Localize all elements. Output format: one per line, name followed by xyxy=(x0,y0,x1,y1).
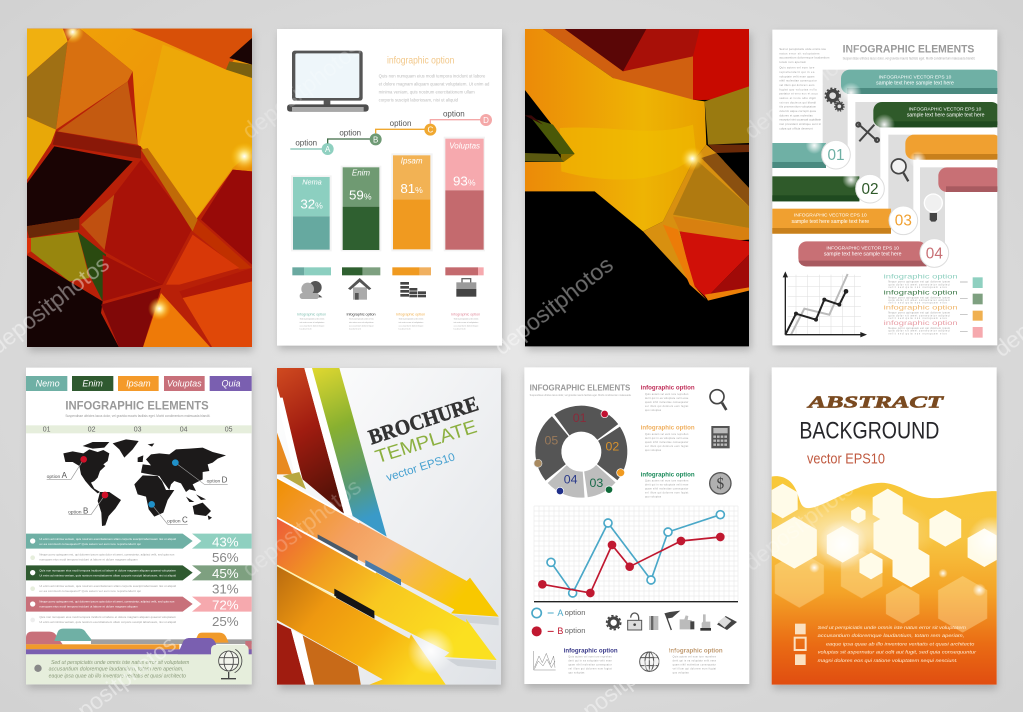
icon: pointing hand xyxy=(700,614,711,631)
row: 31%: ex ea commodi consequatur? Quis autem vel eum iure reprehenderit qui xyxy=(39,589,141,593)
number band: 05 xyxy=(225,427,233,434)
legend: A option: A xyxy=(557,608,563,618)
icon: gear xyxy=(607,616,621,630)
icon: thumb up xyxy=(680,615,694,629)
row: 25%: Quis non numquam eius modi tempora incidunt ut labore et dolore magnam aliquam quaerat voluptatem xyxy=(39,615,177,619)
colour swatches xyxy=(292,267,484,275)
text block: left column: accusantium doloremque laudantium xyxy=(779,56,830,60)
ribbon: teal lower with 01 xyxy=(771,140,850,169)
label column 2: Sed ut perspiciatis unde omnis xyxy=(349,318,374,321)
text block: left column: samus et iusto odio digni xyxy=(779,96,816,100)
tab: Voluptas xyxy=(164,376,205,391)
footer text panel: Sed ut perspiciatis unde omnis iste natus error sit voluptatem xyxy=(51,660,190,666)
text block: left column: natus error sit voluptatem xyxy=(779,51,820,55)
option block: tan: vel illum qui dolorem eum fugiat xyxy=(673,668,716,671)
step connector D: D xyxy=(483,116,489,125)
number band: 02 xyxy=(88,427,96,434)
row: 25%: Ut enim ad minima veniam, quis nostrum exercitationem ullam corporis suscipit laboriosam, nisi ut aliquid xyxy=(39,620,176,624)
option block: tan: quam nihil molestiae consequatur xyxy=(673,664,716,667)
ribbon: green lower with 02: 02 xyxy=(861,181,879,198)
lens flares xyxy=(61,21,258,320)
label column 4: Sed ut perspiciatis unde omnis xyxy=(454,318,478,321)
watermarks on light covers: depositphotos xyxy=(739,467,868,576)
label column 2: iste natus error sit voluptatem xyxy=(349,321,374,324)
ribbon: teal lower with 01: 01 xyxy=(827,147,845,164)
option block: tan xyxy=(669,649,723,674)
label column 3: accusantium doloremque xyxy=(399,324,424,327)
option block: magenta: quam nihil molestiae consequatur xyxy=(645,401,689,404)
panel: infographic elements steps xyxy=(771,28,1002,346)
label column 2: laudantium xyxy=(349,327,361,330)
bar: Nema 32%: 32% xyxy=(300,197,323,212)
row: 31% xyxy=(30,582,239,597)
watermarks on light covers xyxy=(237,35,868,582)
legend item: orange xyxy=(884,306,983,321)
title: BROCHURE: BROCHURE xyxy=(365,391,481,449)
row: 56%: 56% xyxy=(212,550,239,565)
text block: magni dolores eos qui ratione voluptatem sequi nesciunt. xyxy=(818,658,958,664)
map marker: option A: option A xyxy=(47,471,68,480)
polygon facets xyxy=(525,29,749,301)
text block: left column: nihil molestiae consequatur xyxy=(779,79,817,83)
legend item: pink xyxy=(884,321,983,338)
bright hexagons xyxy=(768,484,1001,587)
sub heading: Suspendisse ultricies lacus dolor, vel gravida mauris facilisis eget. Morbi condimentum malesuada blandit. xyxy=(843,57,975,61)
option block: green: derit qui in ea voluptate velit esse xyxy=(645,484,689,487)
legend item: green: velit sed quia non numquam eius xyxy=(888,302,947,305)
bar: Voluptas 93%: Voluptas xyxy=(449,142,480,151)
option block: magenta: quo voluptas xyxy=(645,409,662,412)
ribbon: pink lower with 04: 04 xyxy=(926,245,943,262)
panel: brochure template cover xyxy=(276,366,504,686)
ribbon: orange lower with 03 xyxy=(771,206,918,235)
row: 43%: 43% xyxy=(212,534,239,549)
tab: Ipsam xyxy=(118,376,159,391)
dark inserts between arrows xyxy=(318,534,401,619)
tab: Voluptas: Voluptas xyxy=(167,379,202,389)
ribbon: green lower with 02 xyxy=(771,174,884,203)
option block: magenta xyxy=(641,385,695,412)
grid background xyxy=(534,506,738,601)
panel: abstract background cover xyxy=(758,366,1014,686)
row: 45%: Ut enim ad minima veniam, quis nostrum exercitationem ullam corporis suscipit laboriosam, nisi ut aliquid xyxy=(39,573,176,577)
ribbon: pink lower with 04 xyxy=(798,239,949,267)
donut labels: 02 xyxy=(605,439,619,453)
step connector B: option xyxy=(339,128,361,137)
icon: dollar coin: $ xyxy=(716,476,724,493)
option block: green: quo voluptas xyxy=(645,496,662,499)
legend item: orange: infographic option xyxy=(884,306,958,312)
legend item: pink: infographic option xyxy=(884,321,958,327)
title: TEMPLATE: TEMPLATE xyxy=(373,415,479,467)
icon: stacked steps xyxy=(400,282,426,297)
light glows xyxy=(809,516,1014,597)
label column 3: laudantium xyxy=(399,327,411,330)
label column 3 xyxy=(396,312,425,330)
label column 1: accusantium doloremque xyxy=(300,324,325,327)
icon: calculator xyxy=(711,426,730,448)
option block: magenta: infographic option xyxy=(641,385,695,392)
text block: left column: fugiat quo voluptas nulla xyxy=(779,87,817,91)
step connector D: option xyxy=(443,109,465,118)
option block: navy: derit qui in ea voluptate velit esse xyxy=(568,660,612,663)
icon: magnifier xyxy=(710,390,726,410)
panel: abstract polygon black cover xyxy=(523,28,751,348)
light burst xyxy=(408,628,454,674)
text block: left column: non provident similique sunt in xyxy=(779,122,822,126)
text block: voluptas sit aspernatur aut odit aut fugit, sed quia consequuntur xyxy=(818,650,976,656)
translucent hexagons xyxy=(775,550,987,633)
icon: handshake xyxy=(717,616,737,630)
orange wave background xyxy=(771,476,999,686)
donut labels: 01 xyxy=(573,411,587,425)
heading: INFOGRAPHIC ELEMENTS xyxy=(843,43,974,55)
ribbon: orange lower with 03: 03 xyxy=(895,213,912,230)
step connector C: C xyxy=(427,126,433,135)
text block: left column: deleniti atque corrupti quos xyxy=(779,109,817,113)
legend item: green: Neque porro quisquam est qui dolorem ipsum xyxy=(888,296,950,299)
text block: intro: minima veniam, quis nostrum exercitationem ullam xyxy=(379,89,475,95)
icon: tools xyxy=(856,123,879,142)
world map xyxy=(63,439,226,526)
option block: tan: derit qui in ea voluptate velit esse xyxy=(673,660,717,663)
polygon facets xyxy=(26,28,252,348)
option block: navy xyxy=(564,649,618,674)
row: 43%: ex ea commodi consequatur? Quis autem vel eum iure reprehenderit qui xyxy=(39,542,141,546)
arrow 2 xyxy=(277,518,497,660)
row: 72% xyxy=(26,597,252,612)
map marker: option B xyxy=(68,492,108,515)
label column 4 xyxy=(451,312,480,330)
option block: green: infographic option xyxy=(641,471,695,478)
soft white bloom over wave xyxy=(758,493,938,573)
ribbon: green upper: sample text here sample text here xyxy=(907,113,985,119)
row: 43% xyxy=(26,534,252,549)
footer text panel xyxy=(26,645,252,686)
option block: green: Quis autem vel eum iure reprehen xyxy=(645,480,689,483)
tab: Quia xyxy=(210,376,252,391)
icon: card xyxy=(649,616,658,630)
donut labels: 03 xyxy=(589,476,603,490)
legend item: green xyxy=(884,290,983,305)
label column 2 xyxy=(346,312,376,330)
arrow 3 xyxy=(277,565,447,686)
ribbon: orange upper xyxy=(905,135,1002,160)
option block: navy: quo voluptas xyxy=(568,671,585,674)
map marker: option D xyxy=(172,459,228,485)
legend item: pink: quia dolor sit amet consectetur adipisci xyxy=(888,330,950,333)
panel: infographic option bar chart xyxy=(277,28,504,346)
row: 45% xyxy=(26,565,252,581)
row: 45%: Quis non numquam eius modi tempora incidunt ut labore et dolore magnam aliquam quaerat voluptatem xyxy=(39,568,177,572)
tab: Ipsam: Ipsam xyxy=(126,379,151,389)
panel: world map infographic xyxy=(26,366,254,686)
donut chart xyxy=(535,405,628,498)
option block: orange: Quis autem vel eum iure reprehen xyxy=(645,433,689,436)
watermarks on light covers: depositphotos xyxy=(237,35,366,144)
option block: navy: infographic option xyxy=(564,649,618,655)
ribbon: teal upper xyxy=(841,70,1001,94)
icon: magnifier xyxy=(891,159,908,181)
legend item: teal: quia dolor sit amet consectetur adipisci xyxy=(888,283,950,286)
row: 31%: Ut enim ad minima veniam, quis nostrum exercitationem ullam corporis suscipit laboriosam nisi ut aliquid xyxy=(39,584,176,588)
step connector C xyxy=(376,119,436,136)
option block: navy: vel illum qui dolorem eum fugiat xyxy=(568,668,612,671)
label column 3: iste natus error sit voluptatem xyxy=(399,321,424,324)
text block: intro: et dolore magnam aliquam quaerat voluptatem. Ut enim ad xyxy=(379,81,490,87)
option block: orange: derit qui in ea voluptate velit esse xyxy=(645,437,689,440)
text block: accusantium doloremque laudantium, totam rem aperiam, xyxy=(818,633,964,639)
label column 4: laudantium xyxy=(454,327,466,330)
step connector A: option xyxy=(295,138,317,147)
ribbon: green upper xyxy=(873,102,1000,127)
step connector A: A xyxy=(325,145,331,154)
option block: green: vel illum qui dolorem eum fugiat xyxy=(645,492,689,495)
ribbon: orange lower with 03: INFOGRAPHIC VECTOR EPS 10 xyxy=(794,213,867,219)
icon: gears xyxy=(825,88,844,111)
heading: INFOGRAPHIC ELEMENTS xyxy=(530,383,631,392)
text block: Sed ut perspiciatis unde omnis iste natus error sit voluptatem xyxy=(818,625,966,631)
option block: tan: Quis autem vel eum iure reprehen xyxy=(673,656,717,659)
ribbon: pink lower with 04: sample text here sample text here xyxy=(824,251,902,257)
donut labels: 05 xyxy=(544,433,558,447)
bar: Voluptas 93%: 93% xyxy=(453,173,476,188)
heading: INFOGRAPHIC ELEMENTS xyxy=(65,398,209,412)
text block: eaque ipsa quae ab illo inventore veritatis et quasi architecto xyxy=(826,641,975,647)
number band xyxy=(26,425,252,434)
row: 25% xyxy=(30,614,239,629)
line series A xyxy=(547,511,724,597)
legend item: green: infographic option xyxy=(884,290,958,296)
legend item: teal: velit sed quia non numquam eius xyxy=(888,286,947,289)
map marker: option C xyxy=(148,501,188,525)
label column 1: laudantium xyxy=(300,327,312,330)
donut labels: 04 xyxy=(564,473,578,487)
row: 56%: numquam eius modi tempora incidunt ut labore et dolore magnam aliquam xyxy=(39,557,138,561)
label column 4: Infographic option xyxy=(451,312,480,316)
option block: orange: quam nihil molestiae consequatur xyxy=(645,441,689,444)
text block: left column: tiis praesentium voluptatum xyxy=(779,105,817,109)
icon: flags xyxy=(664,611,680,630)
legend item: teal: infographic option xyxy=(884,274,958,280)
map marker: option A xyxy=(47,456,87,480)
label column 1: iste natus error sit voluptatem xyxy=(300,321,325,324)
donut dots xyxy=(534,410,625,495)
bar: Enim 59%: 59% xyxy=(349,187,372,202)
ribbon glows xyxy=(806,82,926,188)
text block: left column: pariatur at vero eos et accu xyxy=(779,92,818,96)
text block: left column: reprehenderit qui in ea xyxy=(779,70,815,74)
label column 2: Infographic option xyxy=(346,312,376,316)
number band: 01 xyxy=(43,427,51,434)
title: vector EPS10: vector EPS10 xyxy=(385,451,457,484)
ribbon: green upper: INFOGRAPHIC VECTOR EPS 10 xyxy=(909,107,982,113)
watermarks on light covers: depositphotos xyxy=(739,35,868,144)
number band: 03 xyxy=(134,427,142,434)
legend: B option: B xyxy=(557,626,563,636)
legend: B option: option xyxy=(565,626,586,635)
text block: left column: excepturi sint occaecati cupiditate xyxy=(779,118,822,122)
step connector B xyxy=(328,128,382,145)
ribbon: teal upper: INFOGRAPHIC VECTOR EPS 10 xyxy=(879,74,952,80)
text block: left column: vel illum qui dolorem eum xyxy=(779,83,815,87)
panel: abstract polygon red orange cover xyxy=(26,21,258,348)
option block: orange: quo voluptas xyxy=(645,449,662,452)
text block: left column: voluptate velit esse quam xyxy=(779,74,815,78)
legend: B option xyxy=(532,626,586,636)
axis line xyxy=(534,600,738,604)
label column 3: Infographic option xyxy=(396,312,425,316)
bar: Voluptas 93% xyxy=(444,137,485,251)
option block: magenta: derit qui in ea voluptate velit esse xyxy=(645,397,689,400)
step connector A xyxy=(290,138,334,155)
tab: Nemo xyxy=(26,376,67,391)
icon: house xyxy=(348,278,371,300)
chart: rising line xyxy=(783,271,867,337)
grey connector bands xyxy=(823,70,945,247)
option block: green xyxy=(641,471,695,499)
footer tabs xyxy=(26,629,252,654)
icon: briefcase xyxy=(456,279,476,297)
watermarks on dark covers xyxy=(0,250,1023,712)
row: 72%: numquam eius modi tempora incidunt ut labore et dolore magnam aliquam xyxy=(39,604,138,608)
row: 56% xyxy=(30,550,239,565)
option block: magenta: Quis autem vel eum iure reprehen xyxy=(645,393,689,396)
option block: magenta: vel illum qui dolorem eum fugiat xyxy=(645,405,689,408)
step connector B: B xyxy=(373,135,378,144)
option block: orange: infographic option xyxy=(641,425,695,432)
bar: Nema 32% xyxy=(291,175,332,251)
option block: orange xyxy=(641,425,695,452)
legend item: orange: quia dolor sit amet consectetur adipisci xyxy=(888,314,950,317)
number band: 04 xyxy=(180,427,188,434)
icon: globe xyxy=(219,649,242,679)
text block: intro: Quis non numquam eius modi tempora incidunt ut labore xyxy=(379,73,486,79)
legend item: pink: Neque porro quisquam est qui dolorem ipsum xyxy=(888,327,950,330)
text block: left column: dolores et quas molestias xyxy=(779,113,813,117)
map marker: option C: option C xyxy=(167,516,188,525)
legend: A option xyxy=(532,608,586,618)
panel: donut and line chart infographic xyxy=(523,366,751,686)
legend item: orange: velit sed quia non numquam eius xyxy=(888,317,947,320)
legend item: teal xyxy=(884,274,983,289)
ribbon: pink upper xyxy=(938,167,1002,192)
lens flare xyxy=(682,149,704,170)
heading: infographic option: infographic option xyxy=(387,55,454,66)
row: 25%: 25% xyxy=(212,614,239,629)
option block: navy: Quis autem vel eum iure reprehen xyxy=(568,656,612,659)
option block: tan: infographic option xyxy=(669,649,723,655)
map marker: option D: option D xyxy=(207,476,228,485)
title: vector EPS10: vector EPS10 xyxy=(807,451,885,467)
text block: left column: totam rem aperiam xyxy=(779,60,807,64)
text block: intro: corporis suscipit laboriosam, nisi ut aliquid xyxy=(379,97,458,103)
tab: Quia: Quia xyxy=(222,379,240,389)
bar: Ipsam 81%: 81% xyxy=(400,181,423,196)
row: 56%: Neque porro quisquam est, qui dolorem ipsum quia dolor sit amet, consectetur, adipisci velit, sed quia non xyxy=(39,553,175,557)
label column 1 xyxy=(297,312,326,330)
footer text panel: eaque ipsa quae ab illo inventore veritatis et quasi architecto xyxy=(49,674,186,680)
option block: navy: quam nihil molestiae consequatur xyxy=(568,664,612,667)
small sparkline xyxy=(534,651,556,670)
ribbon: orange lower with 03: sample text here sample text here xyxy=(791,219,869,225)
tab: Enim: Enim xyxy=(82,379,103,389)
bar: Ipsam 81% xyxy=(391,153,433,251)
row: 31%: 31% xyxy=(212,582,239,597)
legend item: orange: Neque porro quisquam est qui dolorem ipsum xyxy=(888,312,950,315)
sub heading: Suspendisse ultricies lacus dolor, vel gravida mauris facilisis eget. Morbi condimentum malesuada. xyxy=(530,393,631,397)
bar: Enim 59% xyxy=(341,166,381,251)
icon: dollar coin xyxy=(710,473,731,494)
donut labels xyxy=(544,411,619,490)
row: 45%: 45% xyxy=(212,566,239,581)
text block: left column: Quis autem vel eum iure xyxy=(779,66,815,70)
row: 72%: 72% xyxy=(212,597,239,612)
step connector C: option xyxy=(390,119,411,128)
label column 1: Sed ut perspiciatis unde omnis xyxy=(300,318,324,321)
diagonal strips xyxy=(277,368,499,686)
label column 4: iste natus error sit voluptatem xyxy=(454,321,479,324)
option block: orange: vel illum qui dolorem eum fugiat xyxy=(645,445,689,448)
bar: Ipsam 81%: Ipsam xyxy=(401,156,423,165)
text block xyxy=(818,625,976,664)
tab: Enim xyxy=(72,376,113,391)
arrow 1 xyxy=(277,478,499,617)
row: 43%: Ut enim ad minima veniam, quis nostrum exercitationem ullam corporis suscipit laboriosam nisi ut aliquid xyxy=(39,537,176,541)
line series B xyxy=(538,533,725,597)
text block: left column xyxy=(779,47,830,130)
legend item: green: quia dolor sit amet consectetur adipisci xyxy=(888,299,950,302)
ribbon: pink lower with 04: INFOGRAPHIC VECTOR EPS 10 xyxy=(826,245,899,251)
legend item: teal: Neque porro quisquam est qui dolorem ipsum xyxy=(888,281,950,284)
footer text panel: accusantium doloremque laudantium, totam rem aperiam, xyxy=(49,667,184,673)
arrow highlight lines xyxy=(277,478,376,598)
bar: Enim 59%: Enim xyxy=(352,168,370,177)
map marker: option B: option B xyxy=(68,506,88,515)
option block: green: quam nihil molestiae consequatur xyxy=(645,488,689,491)
icon: people xyxy=(300,281,322,299)
label column 1: Infographic option xyxy=(297,312,326,316)
text block: left column: Sed ut perspiciatis unde omnis iste xyxy=(779,47,827,51)
text block: intro xyxy=(379,73,490,103)
title: ABSTRACT: ABSTRACT xyxy=(807,393,944,412)
tab: Nemo: Nemo xyxy=(36,379,60,389)
text block: left column: culpa qui officia deserunt xyxy=(779,126,813,130)
label column 4: accusantium doloremque xyxy=(454,324,479,327)
step connector D xyxy=(430,109,492,126)
option block: tan: quo voluptas xyxy=(673,671,689,674)
ribbon: teal upper: sample text here sample text here xyxy=(876,81,954,87)
legend item: pink: velit sed quia non numquam eius xyxy=(888,332,947,335)
row: 72%: Neque porro quisquam est, qui dolorem ipsum quia dolor sit amet, consectetur, adipisci velit, sed quia non xyxy=(39,599,175,603)
label column 3: Sed ut perspiciatis unde omnis xyxy=(399,318,423,321)
icon: light bulb xyxy=(924,194,942,222)
text block: left column: ssimos ducimus qui blandi xyxy=(779,100,816,104)
label column 2: accusantium doloremque xyxy=(349,324,374,327)
bar: Nema 32%: Nema xyxy=(302,178,322,187)
watermarks on dark covers: depositphotos xyxy=(489,251,618,360)
legend: A option: option xyxy=(565,608,586,617)
watermarks on light covers: depositphotos xyxy=(237,473,366,582)
icon: padlock xyxy=(628,613,642,630)
bullet squares xyxy=(795,624,806,665)
title: BACKGROUND: BACKGROUND xyxy=(799,418,939,445)
sub heading: Suspendisse ultricies lacus dolor, vel gravida mauris facilisis eget. Morbi condimentum malesuada blandit. xyxy=(65,413,210,418)
icon: laptop xyxy=(287,51,369,112)
icon: globe xyxy=(640,652,659,671)
